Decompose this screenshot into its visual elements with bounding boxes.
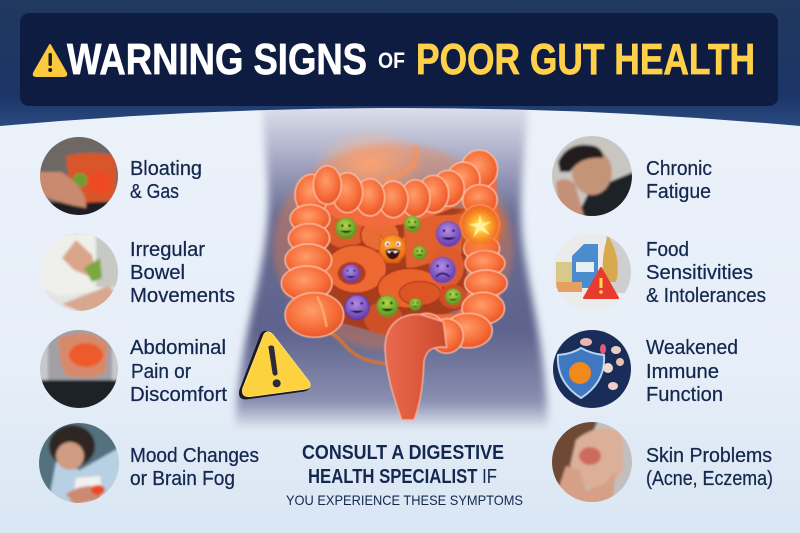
symptom: irregular bowel movements bbox=[40, 233, 234, 311]
label: function: Function bbox=[646, 384, 723, 406]
germ: green 1 bbox=[336, 218, 356, 239]
symptom: bloating and gas bbox=[40, 137, 201, 215]
header band bbox=[0, 0, 800, 126]
icon: large warning triangle bbox=[239, 331, 310, 399]
photo: tired man bbox=[552, 136, 632, 216]
label: mood changes: Mood Changes bbox=[130, 445, 259, 467]
large intestine: ascending bbox=[281, 174, 344, 337]
label: and gas: & Gas bbox=[130, 181, 179, 203]
large intestine: base tube bbox=[307, 168, 485, 331]
title text: of: OF bbox=[378, 48, 405, 73]
label: or brain fog: or Brain Fog bbox=[130, 468, 235, 490]
illustration: torso silhouette bbox=[235, 100, 548, 428]
label: pain or: Pain or bbox=[131, 361, 191, 383]
germ: green 3 bbox=[413, 246, 426, 259]
cta line 3: YOU EXPERIENCE THESE SYMPTOMS bbox=[286, 492, 523, 508]
symptom: abdominal pain or discomfort bbox=[40, 330, 227, 408]
title text: warning signs: WARNING SIGNS bbox=[67, 35, 367, 84]
cta line 2: HEALTH SPECIALIST IF bbox=[308, 466, 497, 488]
label: and intolerances: & Intolerances bbox=[646, 285, 766, 307]
germ: purple 4 bbox=[345, 295, 369, 320]
icon: title warning triangle bbox=[34, 45, 66, 76]
label: acne, eczema: (Acne, Eczema) bbox=[646, 468, 773, 490]
germ: green 6 bbox=[409, 298, 421, 310]
right symptom column bbox=[546, 130, 773, 508]
photo: woman with irritated skin bbox=[552, 422, 632, 502]
germ: purple 1 bbox=[436, 222, 461, 246]
label: fatigue: Fatigue bbox=[646, 181, 711, 203]
germ: green 2 bbox=[404, 216, 420, 232]
photo: woman in discomfort bbox=[39, 423, 119, 503]
symptom: weakened immune function bbox=[553, 330, 737, 408]
photo: food items and alert bbox=[553, 233, 631, 311]
symptom: skin problems bbox=[552, 422, 772, 502]
large intestine: descending bbox=[409, 185, 507, 353]
icon: shield and virus bbox=[553, 330, 631, 408]
symptom: food sensitivities and intolerances bbox=[553, 233, 766, 311]
label: skin problems: Skin Problems bbox=[646, 445, 772, 467]
germ: green 4 bbox=[445, 289, 461, 305]
germ: green 5 bbox=[377, 295, 398, 317]
rectum bbox=[385, 314, 447, 420]
cta line 1: CONSULT A DIGESTIVE bbox=[302, 442, 504, 464]
title banner bbox=[20, 13, 778, 106]
left symptom column bbox=[33, 131, 259, 510]
label: immune: Immune bbox=[646, 361, 719, 383]
photo: hands on white shirt bbox=[40, 233, 118, 311]
inflammation burst bbox=[452, 198, 508, 254]
call to action bbox=[286, 442, 523, 508]
photo: hands on bloated belly bbox=[40, 137, 118, 215]
large intestine: transverse bbox=[313, 150, 498, 218]
photo: clutching abdomen bbox=[40, 330, 118, 408]
colon glow bbox=[273, 143, 513, 350]
stomach glow bbox=[313, 127, 427, 200]
small intestine bbox=[324, 208, 467, 335]
symptom: chronic fatigue bbox=[552, 136, 712, 216]
germ: orange monster bbox=[379, 235, 406, 263]
title bbox=[34, 35, 755, 84]
label: food: Food bbox=[646, 239, 689, 261]
illustration: colon and germs bbox=[273, 127, 513, 420]
symptom: mood changes or brain fog bbox=[39, 423, 258, 503]
label: chronic: Chronic bbox=[646, 158, 712, 180]
label: bloating: Bloating bbox=[130, 158, 202, 180]
label: discomfort: Discomfort bbox=[130, 384, 227, 406]
germ: purple 3 bbox=[430, 257, 455, 283]
label: bowel: Bowel bbox=[130, 262, 185, 284]
label: movements: Movements bbox=[130, 285, 235, 307]
label: abdominal: Abdominal bbox=[130, 337, 226, 359]
appendix bbox=[327, 332, 390, 364]
label: sensitivities: Sensitivities bbox=[646, 262, 753, 284]
germ: purple 2 bbox=[342, 265, 360, 282]
label: weakened: Weakened bbox=[646, 337, 738, 359]
label: irregular: Irregular bbox=[130, 239, 205, 261]
